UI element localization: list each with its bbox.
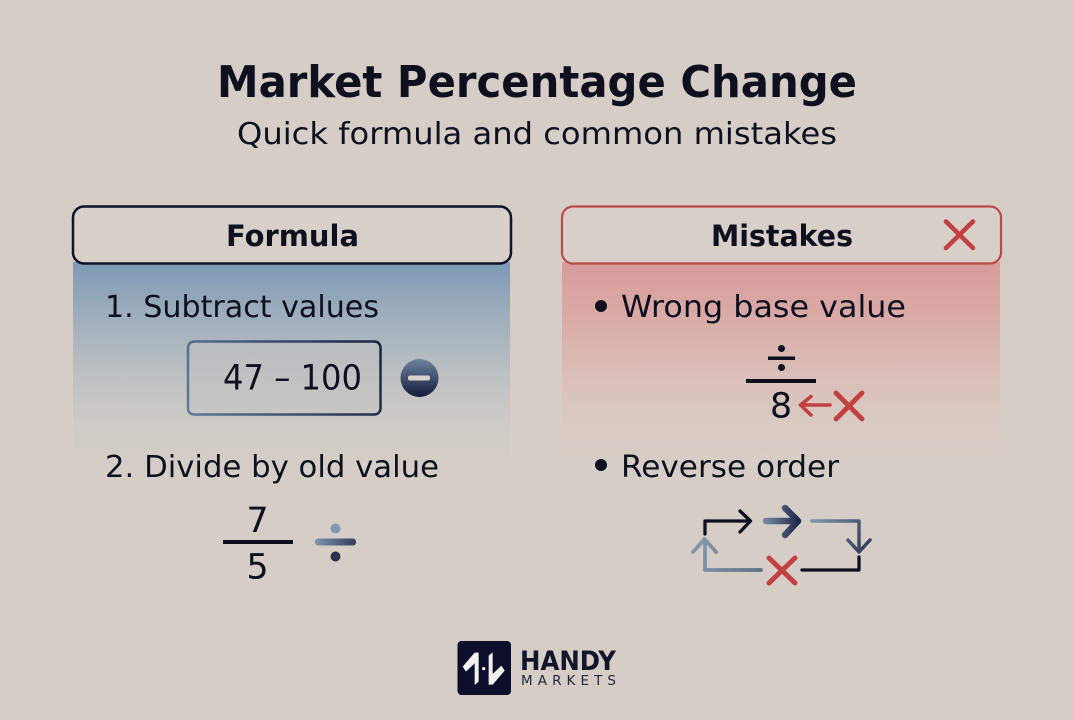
bullet: wrong base value: Wrong base value: [621, 290, 906, 325]
panel: mistakes: [562, 206, 1001, 583]
bullet: reverse order: Reverse order: [621, 450, 840, 485]
fraction 7 over 5: [223, 501, 293, 588]
formula header: Formula: [226, 219, 359, 253]
subtraction box: [188, 342, 380, 414]
logo wordmark: [520, 646, 616, 689]
logo mark: [458, 641, 511, 695]
subtitle: Quick formula and common mistakes: [237, 117, 837, 152]
icon: red arrow and cross: [800, 393, 862, 419]
mistakes header: Mistakes: [711, 219, 853, 253]
wrong base fraction: [746, 345, 816, 426]
icon: header red cross: [946, 222, 973, 248]
logo wordmark: MARKETS: [521, 673, 616, 689]
mistakes header: [562, 206, 1001, 264]
formula header: [73, 206, 511, 264]
icon: broken cycle arrows: [693, 508, 870, 583]
logo: Handy Markets: [458, 641, 616, 695]
fraction 7 over 5: 5: [246, 548, 269, 588]
panel: formula: [73, 206, 511, 588]
formula panel gradient background: [73, 262, 510, 490]
title: Market Percentage Change: [217, 57, 857, 108]
mistakes panel gradient background: [562, 262, 1000, 490]
fraction 7 over 5: 7: [246, 501, 269, 541]
step 1 label: 1. Subtract values: [105, 290, 379, 325]
icon: minus circle: [400, 359, 438, 397]
icon: division sign: [315, 524, 356, 562]
logo wordmark: HANDY: [520, 646, 616, 677]
step 2 label: 2. Divide by old value: [105, 450, 439, 485]
subtraction box: 47 – 100: [223, 358, 362, 398]
wrong base fraction: 8: [770, 386, 792, 426]
